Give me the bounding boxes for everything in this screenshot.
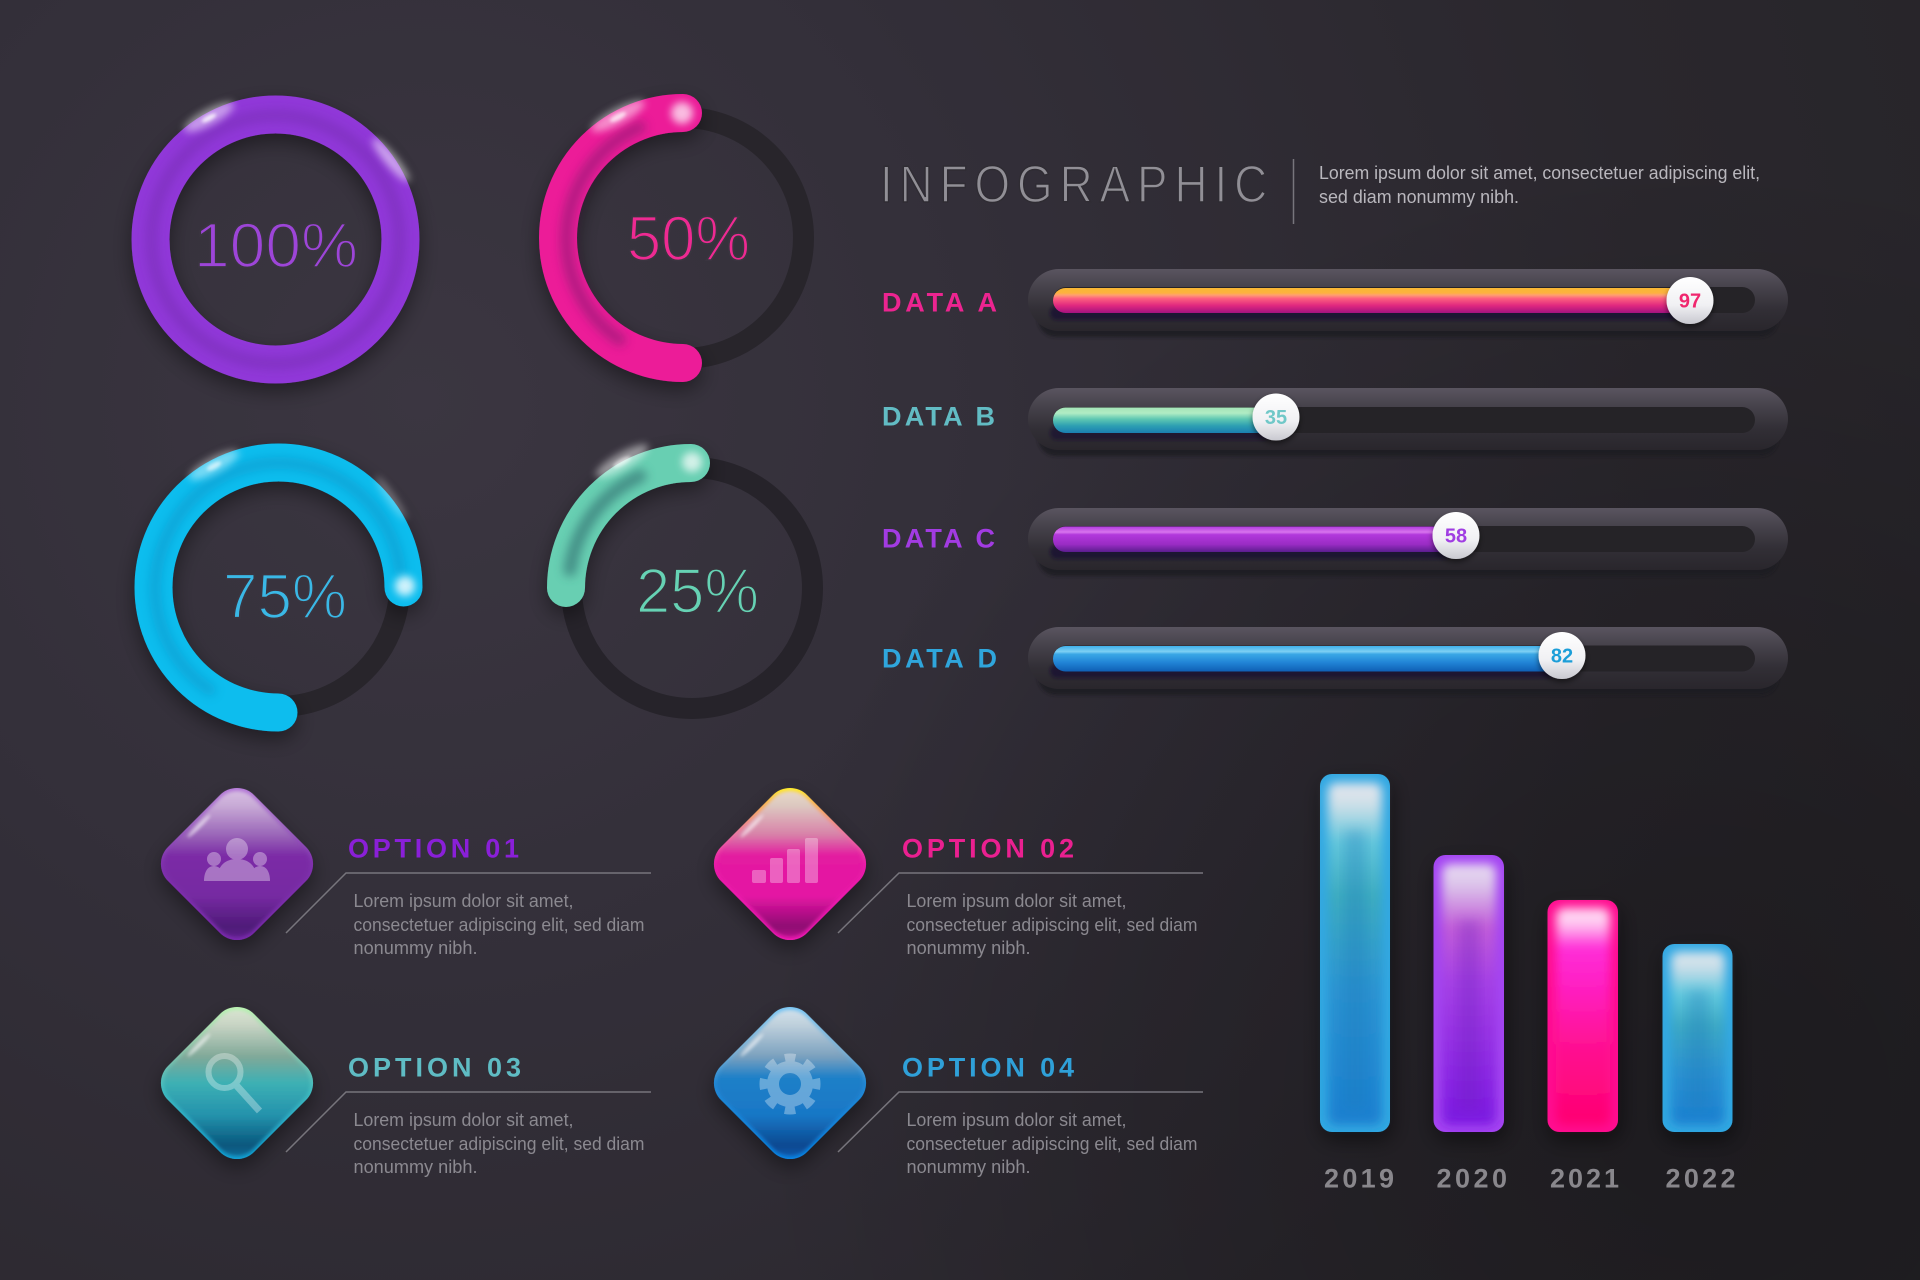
heading: OPTION 02 xyxy=(902,834,1074,864)
value: 75%: 75% xyxy=(223,562,347,632)
heading: OPTION 03 xyxy=(348,1052,521,1082)
description xyxy=(906,1110,1198,1177)
donut chart: 50% xyxy=(558,95,804,363)
axis labels: 2021 xyxy=(1550,1164,1619,1194)
donut chart: 75% xyxy=(154,445,415,712)
slider knob: 82: 82 xyxy=(1551,646,1573,668)
progress row: data a xyxy=(882,269,1788,337)
intro text xyxy=(1319,163,1760,207)
label: data a: DATA A xyxy=(882,288,997,318)
value: 100%: 100% xyxy=(194,211,358,281)
bar: 2020 xyxy=(1434,855,1504,1132)
slider knob: 58: 58 xyxy=(1445,526,1467,548)
value: 25%: 25% xyxy=(636,556,759,626)
description: nonummy nibh. xyxy=(906,1157,1030,1177)
description: consectetuer adipiscing elit, sed diam xyxy=(906,915,1198,935)
slider knob: 82 xyxy=(1538,632,1586,679)
option 03 xyxy=(161,1007,651,1177)
value: 50%: 50% xyxy=(627,204,750,274)
slider knob: 58 xyxy=(1432,512,1480,559)
description xyxy=(354,891,644,958)
donut chart: 100% xyxy=(150,97,414,365)
label: data c: DATA C xyxy=(882,524,995,554)
bar: 2021 xyxy=(1548,900,1618,1132)
label: data b: DATA B xyxy=(882,402,995,432)
option 02 xyxy=(714,788,1203,958)
description: Lorem ipsum dolor sit amet, xyxy=(354,891,574,911)
label: data d: DATA D xyxy=(882,644,997,674)
description: consectetuer adipiscing elit, sed diam xyxy=(354,1134,644,1154)
slider knob: 35 xyxy=(1252,394,1300,440)
description: Lorem ipsum dolor sit amet, xyxy=(906,1110,1126,1130)
icon: bar signal diamond xyxy=(714,788,866,940)
description: Lorem ipsum dolor sit amet, xyxy=(906,891,1126,911)
slider knob: 97: 97 xyxy=(1679,290,1701,312)
progress row: data c xyxy=(882,508,1788,576)
description: nonummy nibh. xyxy=(354,938,478,958)
progress row: data b xyxy=(882,388,1788,456)
axis labels xyxy=(1324,1164,1736,1194)
description: nonummy nibh. xyxy=(906,938,1030,958)
title: INFOGRAPHIC xyxy=(880,156,1267,214)
icon: people diamond xyxy=(161,788,313,940)
bar chart xyxy=(1320,774,1736,1194)
intro text: sed diam nonummy nibh. xyxy=(1319,187,1519,207)
axis labels: 2022 xyxy=(1666,1164,1736,1194)
bar: 2019 xyxy=(1320,774,1390,1132)
option 01 xyxy=(161,788,651,958)
heading: OPTION 01 xyxy=(348,834,519,864)
description xyxy=(906,891,1198,958)
description: consectetuer adipiscing elit, sed diam xyxy=(354,915,644,935)
description: consectetuer adipiscing elit, sed diam xyxy=(906,1134,1198,1154)
icon: gear diamond xyxy=(714,1007,866,1159)
heading: OPTION 04 xyxy=(902,1052,1074,1082)
description: nonummy nibh. xyxy=(354,1157,478,1177)
icon: magnifier diamond xyxy=(161,1007,313,1159)
description: Lorem ipsum dolor sit amet, xyxy=(354,1110,574,1130)
bar: 2022 xyxy=(1662,944,1732,1132)
option 04 xyxy=(714,1007,1203,1177)
axis labels: 2020 xyxy=(1436,1164,1507,1194)
axis labels: 2019 xyxy=(1324,1164,1394,1194)
progress row: data d xyxy=(882,627,1788,695)
slider knob: 97 xyxy=(1666,277,1714,324)
slider knob: 35: 35 xyxy=(1265,407,1287,429)
description xyxy=(354,1110,644,1177)
donut chart: 25% xyxy=(566,439,812,708)
intro text: Lorem ipsum dolor sit amet, consectetuer adipiscing elit, xyxy=(1319,163,1760,183)
